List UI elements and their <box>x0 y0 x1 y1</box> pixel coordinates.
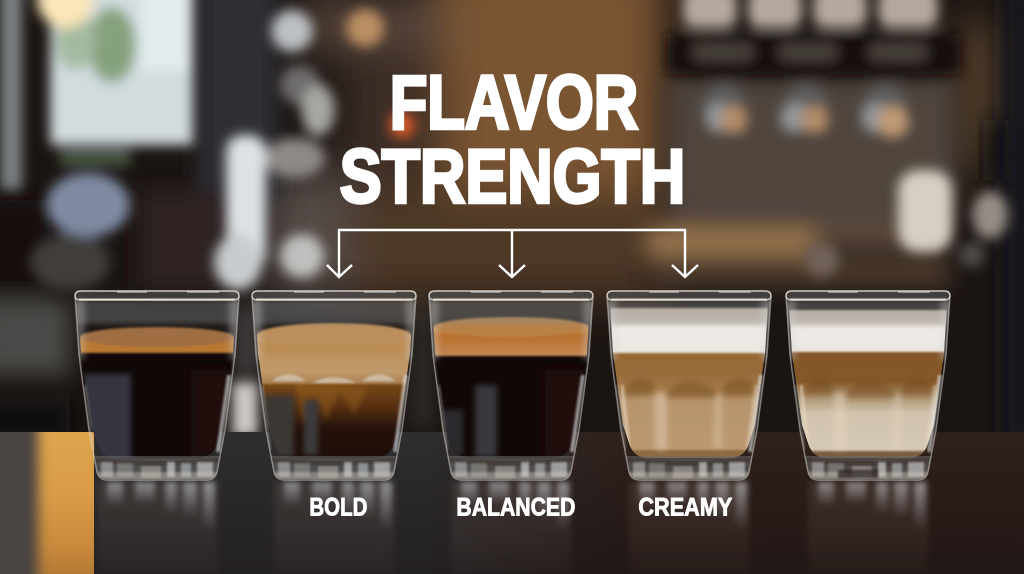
glass 2: medium <box>244 291 424 482</box>
label: bold: BOLD <box>309 494 367 522</box>
glass 1: bold <box>67 291 247 482</box>
glass 4: creamy <box>599 291 779 482</box>
title <box>340 60 685 219</box>
counter <box>0 432 1024 574</box>
label: creamy: CREAMY <box>638 494 733 522</box>
label: balanced: BALANCED <box>456 494 575 522</box>
glass 3: balanced <box>421 291 601 482</box>
title: FLAVOR <box>390 60 638 145</box>
bracket arrows <box>327 230 698 277</box>
glass 5: lightest <box>778 291 958 482</box>
title: STRENGTH <box>340 134 685 219</box>
glass reflections on counter <box>97 482 928 574</box>
